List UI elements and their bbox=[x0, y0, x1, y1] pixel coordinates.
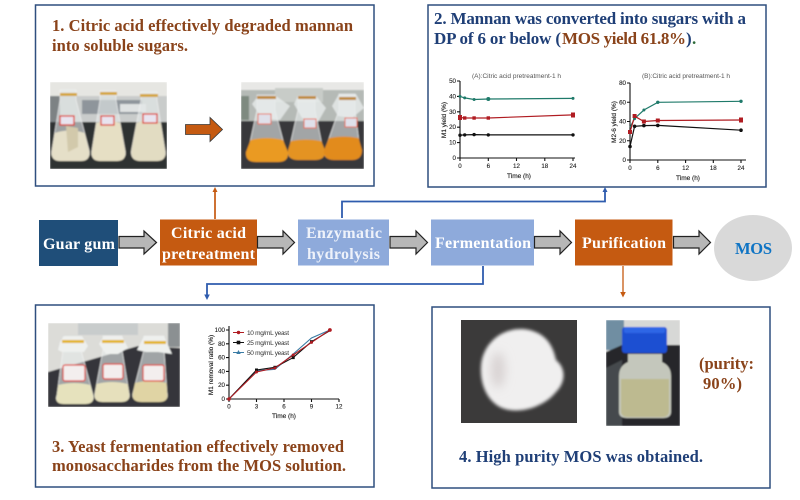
chart B: M2-6 yield: 18 bbox=[710, 165, 717, 172]
product: MOS ellipse bbox=[714, 215, 792, 281]
photo: flasks after pretreatment bbox=[241, 82, 364, 169]
flow box: guar gum: Guar gum bbox=[43, 236, 116, 253]
chart: M1 removal ratio: 3 bbox=[255, 404, 259, 410]
flow box: enzymatic hydrolysis: hydrolysis bbox=[307, 246, 380, 263]
flow box: guar gum bbox=[39, 220, 118, 266]
connector: hydrolysis to panel 2 bbox=[342, 187, 608, 218]
arrow: pretreatment to hydrolysis bbox=[258, 231, 294, 254]
heading: panel 2: 2. Mannan was converted into sugars with a bbox=[434, 9, 746, 28]
chart: M1 removal ratio bbox=[208, 326, 343, 420]
heading: panel 2: DP of 6 or below ( bbox=[434, 29, 561, 48]
heading: panel 1: 1. Citric acid effectively degraded mannan bbox=[52, 16, 353, 35]
chart A: M1 yield: 40 bbox=[449, 93, 457, 100]
photo: fermentation flasks bbox=[48, 323, 180, 407]
chart B: M2-6 yield: 40 bbox=[619, 118, 627, 126]
heading: panel 2 bbox=[434, 9, 746, 48]
heading: panel 2: . bbox=[692, 29, 696, 48]
chart B: M2-6 yield: 60 bbox=[619, 99, 627, 106]
chart: M1 removal ratio: 40 bbox=[218, 368, 226, 375]
chart: M1 removal ratio: 0 bbox=[227, 404, 231, 410]
chart A: M1 yield: 10 bbox=[449, 140, 457, 147]
chart B: M2-6 yield: 0 bbox=[623, 157, 627, 164]
heading: panel 3 bbox=[52, 437, 346, 475]
photo: MOS solution bottle bbox=[606, 320, 680, 426]
chart: M1 removal ratio: 6 bbox=[282, 404, 286, 410]
chart A: M1 yield: (A):Citric acid pretreatment-1 h bbox=[472, 73, 561, 80]
callout: purity 90%: 90%) bbox=[703, 374, 742, 393]
flow box: fermentation: Fermentation bbox=[435, 235, 531, 252]
legend: 25 mg/mL yeast bbox=[247, 340, 289, 347]
flow box: fermentation bbox=[431, 220, 534, 266]
legend: 50 mg/mL yeast bbox=[247, 350, 289, 357]
flow box: enzymatic hydrolysis: Enzymatic bbox=[306, 225, 382, 242]
flow box: purification: Purification bbox=[582, 235, 666, 252]
connector: pretreatment to panel 1 bbox=[212, 187, 218, 219]
chart B: M2-6 yield: 20 bbox=[619, 138, 627, 145]
callout: purity 90%: (purity: bbox=[699, 354, 754, 373]
chart A: M1 yield: 20 bbox=[449, 124, 457, 131]
flow box: citric acid pretreatment: pretreatment bbox=[162, 246, 256, 263]
chart: M1 removal ratio: 100 bbox=[215, 327, 226, 334]
panel 1: citric acid pretreatment bbox=[36, 5, 374, 186]
panel 4: purification bbox=[432, 307, 770, 488]
chart A: M1 yield: 30 bbox=[449, 109, 457, 116]
chart B: M2-6 yield bbox=[611, 73, 746, 182]
heading: panel 3: 3. Yeast fermentation effectively removed bbox=[52, 437, 344, 456]
chart: M1 removal ratio: Time (h) bbox=[272, 413, 296, 420]
heading: panel 1 bbox=[52, 16, 353, 55]
chart: M1 removal ratio: 60 bbox=[218, 355, 226, 362]
chart A: M1 yield: 50 bbox=[449, 78, 457, 85]
chart B: M2-6 yield: (B):Citric acid pretreatment-1 h bbox=[642, 73, 730, 80]
chart B: M2-6 yield: Time (h) bbox=[676, 175, 700, 182]
flow box: citric acid pretreatment bbox=[160, 220, 257, 266]
legend: 10 mg/mL yeast bbox=[247, 330, 289, 337]
chart: M1 removal ratio: 0 bbox=[222, 396, 226, 403]
heading: panel 1: into soluble sugars. bbox=[52, 36, 188, 55]
chart: M1 removal ratio: 12 bbox=[336, 404, 343, 410]
chart A: M1 yield: M1 yield (%) bbox=[441, 102, 448, 138]
photo: flasks before pretreatment bbox=[50, 82, 167, 169]
chart B: M2-6 yield: 0 bbox=[628, 165, 632, 172]
photo: white MOS powder bbox=[461, 320, 577, 423]
chart A: M1 yield: 18 bbox=[541, 163, 549, 170]
chart B: M2-6 yield: 6 bbox=[656, 165, 660, 172]
chart B: M2-6 yield: 80 bbox=[619, 80, 627, 87]
chart: M1 removal ratio: 80 bbox=[218, 341, 226, 348]
chart: M1 removal ratio: 20 bbox=[218, 382, 226, 389]
callout: purity 90% bbox=[699, 354, 754, 393]
connector: purification to panel 4 bbox=[620, 266, 626, 298]
arrow: guar gum to pretreatment bbox=[119, 231, 156, 254]
chart A: M1 yield: 12 bbox=[513, 163, 520, 170]
chart A: M1 yield: 6 bbox=[487, 163, 491, 170]
chart A: M1 yield: 0 bbox=[458, 163, 462, 170]
heading: panel 4: 4. High purity MOS was obtained. bbox=[459, 447, 703, 466]
product: MOS ellipse: MOS bbox=[735, 239, 772, 258]
chart: M1 removal ratio: M1 removal ratio (%) bbox=[208, 335, 215, 395]
chart B: M2-6 yield: 12 bbox=[682, 165, 690, 172]
chart B: M2-6 yield: 24 bbox=[738, 165, 745, 172]
chart: M1 removal ratio: 9 bbox=[310, 404, 314, 410]
heading: panel 3: monosaccharides from the MOS solution. bbox=[52, 456, 346, 475]
chart B: M2-6 yield: M2-6 yield (%) bbox=[611, 101, 618, 143]
chart A: M1 yield: 0 bbox=[453, 155, 457, 162]
arrow: purification to MOS bbox=[674, 231, 710, 254]
flow box: purification bbox=[575, 220, 672, 266]
flow box: enzymatic hydrolysis bbox=[298, 220, 389, 266]
flow box: citric acid pretreatment: Citric acid bbox=[171, 225, 246, 242]
legend bbox=[233, 330, 289, 357]
arrow: hydrolysis to fermentation bbox=[390, 231, 428, 254]
chart A: M1 yield bbox=[441, 73, 577, 180]
panel 2: enzymatic hydrolysis bbox=[428, 5, 766, 187]
arrow: fermentation to purification bbox=[534, 231, 572, 254]
arrow: before to after bbox=[186, 118, 222, 142]
heading: panel 2: ) bbox=[686, 29, 692, 48]
heading: panel 2: MOS yield 61.8% bbox=[562, 29, 686, 48]
connector: fermentation to panel 3 bbox=[204, 266, 483, 300]
panel 3: yeast fermentation bbox=[36, 305, 374, 487]
chart A: M1 yield: 24 bbox=[570, 163, 577, 170]
chart A: M1 yield: Time (h) bbox=[507, 173, 531, 180]
